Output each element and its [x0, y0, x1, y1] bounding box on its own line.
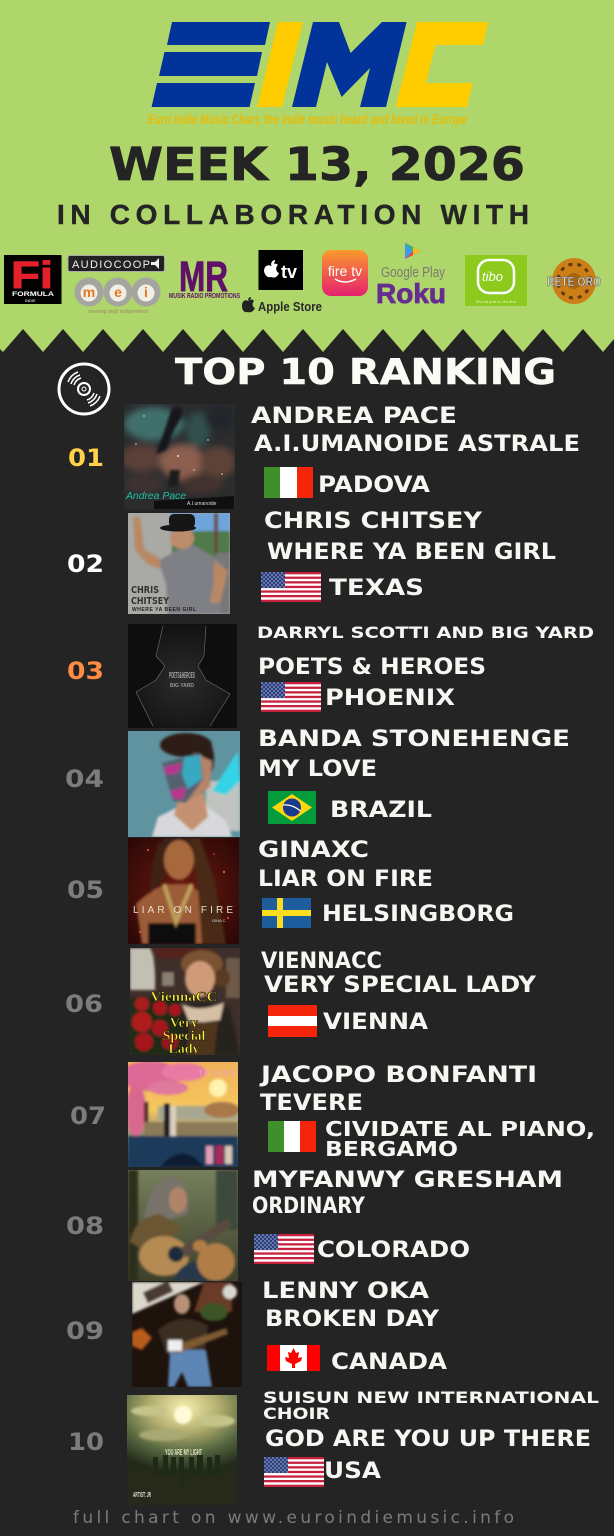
location: PADOVA [318, 473, 430, 498]
icon: vinyl disc [59, 364, 109, 414]
logo tagline: Euro Indie Music Chart, the indie music heard and loved in Europe [148, 111, 467, 127]
cover: ViennaCC: Very [170, 1016, 198, 1031]
location: COLORADO [317, 1238, 470, 1263]
location: USA [324, 1459, 381, 1484]
entry 04 [65, 727, 570, 837]
artist: CHOIR [263, 1404, 330, 1423]
logo: Roku: Roku [376, 278, 446, 309]
cover: ViennaCC: ViennaCC [150, 990, 218, 1005]
cover: Chris Chitsey [128, 513, 230, 614]
logo: MEI [74, 278, 160, 315]
logo: Tibo: tibo [482, 269, 503, 284]
flag: Brazil [268, 791, 316, 824]
cover: ViennaCC: Special [163, 1029, 205, 1044]
entry 08 [66, 1168, 563, 1281]
artist: VIENNACC [261, 949, 382, 974]
green header band with zigzag edge [0, 0, 614, 352]
title: WHERE YA BEEN GIRL [267, 540, 556, 565]
footer note: full chart on www.euroindiemusic.info [73, 1508, 514, 1528]
cover: Banda Stonehenge [128, 731, 240, 837]
title: BROKEN DAY [265, 1307, 440, 1332]
title: LIAR ON FIRE [258, 867, 433, 892]
location: BRAZIL [330, 798, 432, 823]
location [325, 1117, 595, 1161]
logo: Apple Store: Apple Store [258, 299, 322, 314]
logo: MEI: e [114, 284, 122, 300]
entry 03 [67, 623, 594, 728]
logo: Musik Radio Promotions: MR [179, 253, 228, 301]
artist: DARRYL SCOTTI AND BIG YARD [257, 623, 594, 642]
title: TEVERE [260, 1091, 363, 1116]
rank 05: 05 [67, 876, 104, 904]
logo: Audiocoop [68, 256, 164, 272]
location: CANADA [331, 1350, 447, 1375]
logo: Formula Indie [4, 255, 62, 304]
artist: GINAXC [258, 838, 369, 863]
rank 06: 06 [65, 990, 103, 1018]
flag: USA [261, 682, 321, 712]
logo: Formula Indie: Fi [11, 255, 53, 297]
cover: Tevere: TEVERE [198, 1069, 235, 1078]
cover: ViennaCC: Lady [168, 1042, 200, 1057]
flag: Sweden [262, 898, 311, 928]
artist [263, 1388, 599, 1423]
logo: Tibo [465, 255, 527, 306]
logo: Apple TV: tv [281, 262, 297, 282]
cover: Poets & Heroes: POETS&HEROES [169, 671, 195, 680]
location: CIVIDATE AL PIANO, [325, 1117, 595, 1141]
cover: Poets & Heroes: BIG YARD [170, 683, 194, 689]
logo: Google Play [381, 243, 445, 281]
cover: Chris Chitsey: CHRIS [131, 585, 159, 596]
rank 04: 04 [65, 765, 104, 793]
entry 01 [68, 404, 580, 509]
cover: God Are You Up There: ARTIST: JR [133, 1492, 151, 1499]
logo: Fire TV [322, 250, 368, 296]
artist: LENNY OKA [262, 1279, 429, 1304]
heading: week: WEEK 13, 2026 [109, 138, 525, 191]
cover: Chris Chitsey: CHITSEY [131, 596, 170, 607]
cover: Andrea Pace: A.I.umanoide [187, 501, 217, 507]
entry 07 [70, 1061, 595, 1167]
heading: top 10 ranking: TOP 10 RANKING [175, 352, 556, 393]
logo: Musik Radio Promotions: MUSIK RADIO PROMOTIONS [169, 293, 240, 300]
title: VERY SPECIAL LADY [264, 973, 537, 998]
cover: Chris Chitsey: WHERE YA BEEN GIRL [132, 607, 196, 613]
title: GOD ARE YOU UP THERE [265, 1427, 591, 1452]
rank 03: 03 [67, 657, 104, 685]
cover: Broken Day [132, 1282, 242, 1387]
rank 08: 08 [66, 1212, 104, 1240]
cover: Liar on Fire: LIAR ON FIRE [133, 905, 233, 916]
flag: Italy [268, 1121, 316, 1152]
location: PHOENIX [325, 686, 455, 711]
flag: Italy [264, 467, 313, 498]
title: A.I.UMANOIDE ASTRALE [254, 432, 580, 457]
rank 01: 01 [68, 444, 104, 472]
flag: USA [254, 1234, 314, 1264]
logo: MEI: meeting degli indipendenti [88, 309, 148, 315]
cover: Liar on Fire [128, 838, 239, 944]
artist: JACOPO BONFANTI [259, 1063, 537, 1088]
artist: CHRIS CHITSEY [264, 509, 483, 534]
logo: Apple Store [242, 297, 322, 314]
cover: Ordinary [128, 1170, 238, 1281]
flag: Austria [268, 1005, 317, 1037]
artist: SUISUN NEW INTERNATIONAL [263, 1388, 599, 1407]
title: MY LOVE [258, 757, 377, 782]
rank 10: 10 [68, 1428, 104, 1456]
logo: Formula Indie: INDIE [25, 298, 36, 303]
cover: ViennaCC [130, 948, 240, 1057]
title: ORDINARY [252, 1194, 366, 1219]
location: HELSINGBORG [322, 902, 514, 927]
location: VIENNA [323, 1010, 428, 1035]
location: TEXAS [329, 576, 424, 601]
rank 02: 02 [67, 550, 104, 578]
logo: MEI: m [83, 284, 95, 300]
rank 07: 07 [70, 1102, 106, 1130]
cover: Poets & Heroes [128, 624, 237, 728]
cover: Andrea Pace [124, 404, 235, 509]
logo: EIMC [152, 22, 488, 107]
entry 10 [68, 1388, 599, 1505]
heading: collaboration: IN COLLABORATION WITH [57, 199, 529, 230]
logo: Fire TV: fire tv [328, 263, 362, 279]
logo: Rete Oro: RETE ORO [547, 274, 601, 289]
cover: Tevere [128, 1062, 238, 1167]
logo: Formula Indie: FORMULA [12, 292, 55, 298]
artist: ANDREA PACE [251, 404, 457, 429]
artist: MYFANWY GRESHAM [252, 1168, 563, 1193]
entry 02 [67, 509, 556, 614]
flag: USA [264, 1457, 324, 1487]
logo: Google Play: Google Play [381, 264, 445, 281]
cover: God Are You Up There [127, 1395, 237, 1505]
entry 09 [66, 1279, 447, 1387]
rank 09: 09 [66, 1317, 104, 1345]
artist: BANDA STONEHENGE [258, 727, 570, 752]
logo: Tibo: it's not just tv, it's tibo [476, 299, 517, 304]
partner logos [4, 243, 601, 315]
logo: Rete Oro [547, 258, 601, 304]
logo: MEI: i [144, 284, 148, 300]
cover: Andrea Pace: Andrea Pace [125, 491, 186, 502]
flag: USA [261, 572, 321, 602]
entry 05 [67, 838, 514, 944]
flag: Canada [267, 1345, 320, 1371]
logo: Audiocoop: AUDIOCOOP [72, 259, 150, 271]
title: POETS & HEROES [258, 655, 486, 680]
location: BERGAMO [325, 1137, 458, 1161]
cover: Liar on Fire: GINA C [212, 918, 226, 923]
entry 06 [65, 948, 537, 1057]
logo: Apple TV [258, 250, 303, 290]
